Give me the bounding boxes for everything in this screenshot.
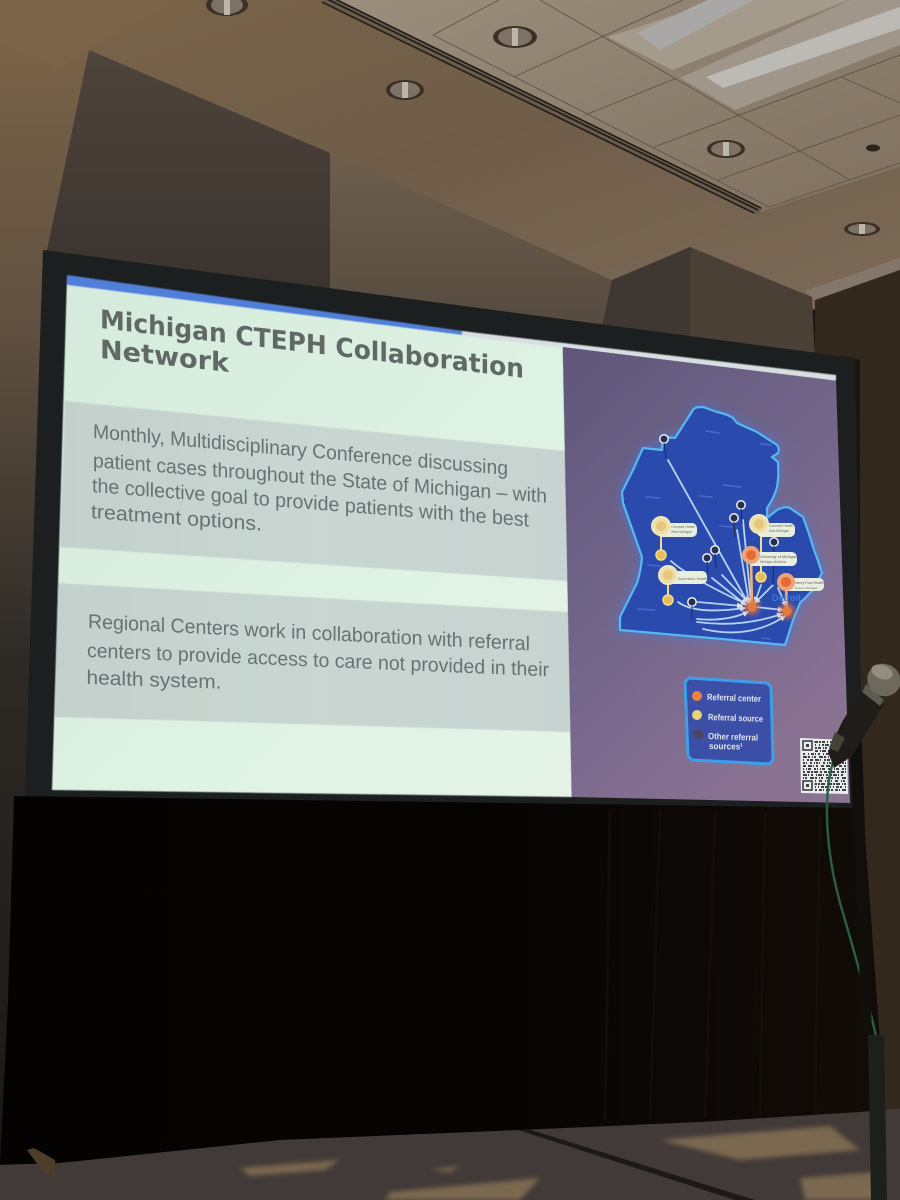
text block: monthly conference: the collective goal to provide patients with the best [92, 475, 529, 531]
blue title bar [67, 275, 462, 335]
text block: regional centers: Regional Centers work in collaboration with referral [88, 611, 530, 655]
floor seam [518, 1129, 755, 1200]
referral center: University of Michigan: University of Michigan [760, 555, 797, 559]
referral source: west label: Corewell Health [671, 525, 695, 529]
legend: other referral sources: sources¹ [709, 741, 743, 752]
faint place names [638, 431, 771, 639]
text band 1 [60, 401, 567, 581]
projection screen frame [25, 250, 863, 812]
microphone stand [850, 742, 887, 1200]
referral source: ascension label: Ascension Health [678, 577, 708, 581]
referral source: west label: West Michigan [671, 530, 692, 534]
marker stems [664, 443, 774, 620]
legend: other referral sources [693, 729, 758, 752]
text block: monthly conference: treatment options. [91, 501, 262, 536]
ceiling tiles [325, 0, 900, 212]
slide: left panel [52, 275, 836, 797]
legend: referral center: Referral center [707, 692, 761, 704]
text block: monthly conference [91, 421, 547, 536]
text band 2 [55, 583, 570, 732]
air diffuser slot [322, 0, 761, 213]
microphone [828, 658, 900, 768]
referral center: Henry Ford Health: Henry Ford Health [795, 581, 824, 585]
referral source: ascension label [659, 566, 708, 605]
referral source: east label: Corewell Health [769, 524, 793, 528]
referral center: University of Michigan [742, 546, 797, 615]
ceiling light fixtures [608, 0, 900, 110]
referral source: east label: East Michigan [769, 529, 789, 533]
carpet floor [0, 1108, 900, 1200]
referral source: west label [652, 517, 697, 560]
referral connection lines [668, 460, 786, 632]
title: Network [100, 335, 230, 379]
map legend [685, 678, 773, 764]
map of Michigan [620, 407, 822, 645]
text block: regional centers [86, 611, 549, 694]
referral center: University of Michigan: Michigan Medicine [760, 560, 787, 564]
Detroit label: Detroit [772, 593, 801, 603]
slide: right panel [563, 347, 850, 803]
legend: referral source: Referral source [708, 712, 763, 724]
QR code [800, 738, 848, 794]
pale title bar [462, 331, 836, 381]
referral center: Henry Ford Health: Detroit, Michigan [795, 586, 818, 590]
text block: monthly conference: Monthly, Multidisciplinary Conference discussing [93, 421, 508, 480]
legend: other referral sources: Other referral [708, 731, 758, 743]
text block: regional centers: health system. [86, 667, 222, 694]
black stage drape [0, 796, 885, 1165]
recessed ceiling lights [206, 0, 880, 236]
small floor object [27, 1148, 55, 1177]
text block: regional centers: centers to provide access to care not provided in their [87, 640, 549, 681]
map outline glow [620, 407, 822, 645]
other referral source markers [660, 435, 778, 606]
text block: monthly conference: patient cases throughout the State of Michigan – with [93, 450, 547, 508]
Michigan network map [620, 407, 824, 645]
microphone cable [827, 762, 878, 1045]
referral source: east label [750, 515, 795, 582]
referral center: Henry Ford Health [777, 573, 824, 619]
title: Michigan CTEPH Collaboration [100, 305, 524, 385]
